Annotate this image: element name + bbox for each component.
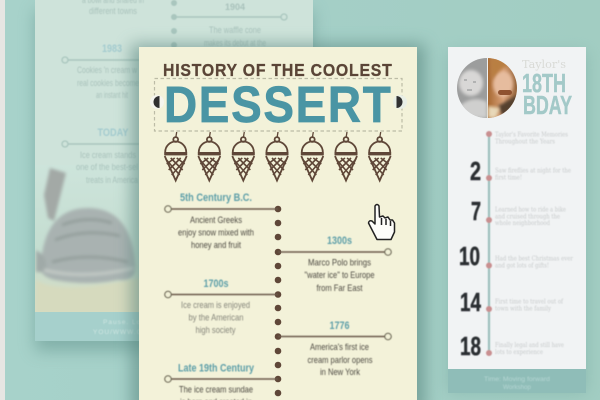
event: 1776: cream parlor opens	[308, 355, 373, 366]
event: 1700s: 1700s	[204, 278, 228, 290]
footer text	[484, 376, 550, 391]
title line: HISTORY OF THE COOLEST	[163, 60, 392, 80]
timeline entries: one of the best-sel	[76, 162, 138, 173]
event: 1300s: 1300s	[327, 235, 352, 247]
event: 1776: America's first ice	[310, 342, 369, 353]
icon: ice cream cone 7	[368, 132, 391, 180]
event: 1700s	[165, 278, 278, 336]
vertical timeline: Finally legal and still have	[495, 342, 564, 349]
timeline spine dots	[275, 206, 281, 396]
ribbon notch right	[393, 95, 407, 109]
vertical timeline: 2	[470, 156, 481, 186]
footer text: Workshop	[503, 384, 531, 391]
vertical timeline: 10	[459, 241, 480, 271]
event: 5th Century B.C.	[165, 192, 278, 251]
panel: center dessert infographic	[131, 44, 425, 400]
event: 1300s	[278, 235, 391, 294]
vertical timeline: and cruised through the	[495, 214, 560, 220]
event: 1300s: "water ice" to Europe	[304, 270, 374, 281]
event: 1776	[278, 320, 391, 378]
timeline entries: The waffle cone	[209, 25, 261, 36]
event: Late 19th Century	[165, 362, 278, 400]
timeline entries: TODAY	[98, 127, 129, 139]
vertical timeline: and got lots of gifts!	[495, 262, 549, 270]
event: 1300s: from Far East	[316, 283, 363, 294]
timeline entries: an instant hit	[96, 90, 128, 101]
portrait photos	[456, 58, 519, 118]
left margin strip	[0, 0, 5, 400]
vertical timeline: First time to travel out of	[495, 298, 564, 306]
title: DESSERT: DESSERT	[164, 77, 391, 134]
vertical timeline: lots to experience	[495, 349, 543, 356]
icon: ice cream cone 1	[164, 132, 187, 180]
event: 1776: 1776	[330, 320, 350, 332]
vertical timeline: Throughout the Years	[495, 138, 555, 146]
timeline entries: real cookies become	[77, 78, 139, 89]
timeline entries	[62, 0, 287, 186]
timeline entries: 1983	[102, 43, 122, 55]
footer text: Time: Moving forward	[484, 376, 550, 383]
event: 1700s: Ice cream is enjoyed	[181, 300, 250, 311]
footer band	[35, 312, 313, 341]
footer text	[93, 319, 158, 336]
event: Late 19th Century: Late 19th Century	[178, 362, 255, 374]
icon: hand cursor	[368, 204, 394, 240]
event: Late 19th Century: The ice cream sundae	[179, 384, 253, 396]
event: 1300s: Marco Polo brings	[308, 258, 371, 268]
vertical timeline: Saw fireflies at night for the	[495, 168, 571, 174]
vertical timeline: whole neighborhood	[495, 220, 550, 227]
event: 1700s: by the American	[188, 312, 244, 324]
icon: ice cream cone 5	[301, 132, 324, 180]
vertical timeline: Taylor's Favorite Memories	[495, 132, 568, 138]
timeline entries: makes its debut at the	[204, 38, 266, 49]
footer band	[448, 369, 586, 393]
vertical timeline: first time!	[495, 174, 522, 182]
footer text: YOU/WWW.CUTE	[93, 329, 158, 336]
icon: ice cream cone 2	[198, 132, 221, 180]
timeline entries: 1904	[225, 2, 246, 13]
vertical timeline: 14	[460, 287, 481, 317]
timeline entries: treats in America	[86, 175, 139, 186]
icon: ice cream cone 6	[334, 132, 358, 180]
timeline entries: Cookies 'n cream w	[77, 65, 137, 76]
timeline entries: Ice cream stands	[80, 150, 136, 161]
heading: 18TH: 18TH	[522, 68, 566, 98]
vertical timeline: town with the family	[495, 306, 552, 312]
icon: ice cream cone 3	[232, 132, 255, 180]
vertical timeline: 18	[460, 331, 481, 361]
vertical timeline	[459, 131, 573, 361]
heading: Taylor's: Taylor's	[522, 57, 566, 71]
selection box	[154, 78, 402, 131]
ribbon notch left	[150, 95, 164, 109]
vertical timeline: 7	[471, 196, 481, 226]
event: 5th Century B.C.: Ancient Greeks	[190, 215, 242, 226]
event: 1700s: high society	[196, 325, 236, 336]
panel: right birthday infographic	[448, 47, 586, 393]
panel: left infographic	[35, 0, 313, 351]
icon: ice cream cone 4	[266, 132, 288, 180]
event: 5th Century B.C.: enjoy snow mixed with	[178, 228, 254, 238]
heading: BDAY: BDAY	[523, 90, 572, 120]
event: 1776: in New York	[320, 367, 360, 378]
event: 5th Century B.C.: 5th Century B.C.	[180, 192, 252, 204]
vertical timeline: Had the best Christmas ever	[495, 256, 573, 262]
footer text: Pause. Look	[103, 319, 150, 326]
timeline entries: different towns	[89, 6, 137, 17]
ice cream photo	[35, 165, 145, 312]
event: 5th Century B.C.: honey and fruit	[191, 240, 241, 251]
vertical timeline: Learned how to ride a bike	[495, 206, 566, 214]
